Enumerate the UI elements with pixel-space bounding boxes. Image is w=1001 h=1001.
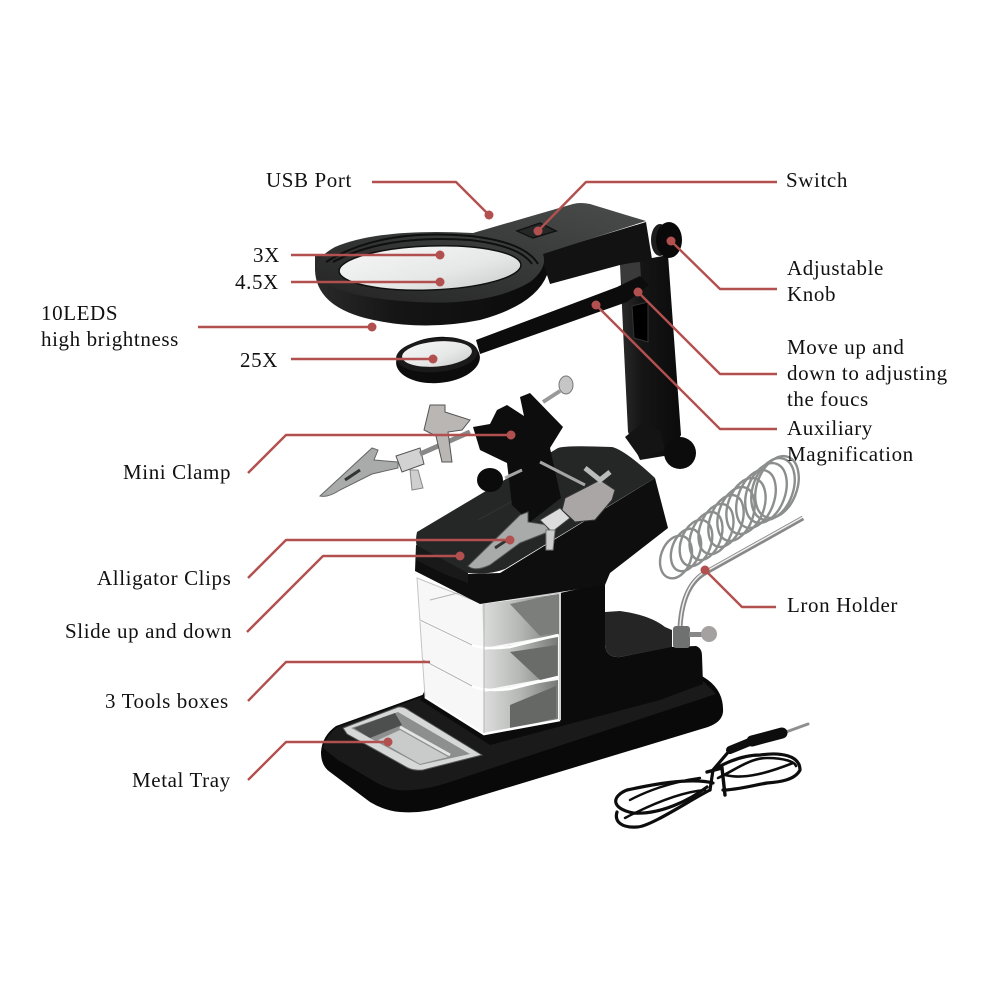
callout: Move up and down: Move up and bbox=[787, 335, 904, 359]
25X auxiliary magnifier bbox=[394, 333, 482, 387]
callout: 4.5X: 4.5X bbox=[235, 270, 279, 294]
callout: 25X bbox=[240, 348, 438, 372]
callout: Auxiliary Magnification: Magnification bbox=[787, 442, 914, 466]
callout: 25X: 25X bbox=[240, 348, 278, 372]
tool boxes bbox=[417, 578, 560, 734]
callout: Switch bbox=[534, 168, 848, 236]
callout: USB Port bbox=[266, 168, 494, 220]
magnifier head, lower wall bbox=[315, 222, 652, 326]
alligator clip, right bbox=[468, 468, 615, 569]
callout: Alligator Clips: Alligator Clips bbox=[97, 566, 231, 590]
adjustable knob top bbox=[651, 222, 682, 258]
callout: Adjustable Knob: Adjustable bbox=[787, 256, 884, 280]
callout: Metal Tray: Metal Tray bbox=[132, 768, 231, 792]
iron holder spring bbox=[654, 450, 807, 583]
callout: 4.5X bbox=[235, 270, 444, 294]
callout: 3X bbox=[253, 243, 444, 267]
callout: Mini Clamp bbox=[123, 430, 516, 484]
auxiliary arm bbox=[476, 276, 649, 354]
callout: Auxiliary Magnification bbox=[592, 300, 914, 466]
lower block and column bbox=[420, 583, 703, 745]
callout: Adjustable Knob: Knob bbox=[787, 282, 836, 306]
callout: 10LEDS high brightness: 10LEDS bbox=[41, 301, 118, 325]
callout: Move up and down: the foucs bbox=[787, 387, 869, 411]
callout: 10LEDS high brightness: high brightness bbox=[41, 327, 179, 351]
iron holder rod bbox=[673, 517, 803, 648]
callout: Switch: Switch bbox=[786, 168, 848, 192]
power cable bbox=[616, 724, 808, 827]
callout: USB Port: USB Port bbox=[266, 168, 352, 192]
lower arm knob and hinge bbox=[625, 425, 696, 469]
base plate bbox=[321, 668, 723, 812]
callout: Metal Tray bbox=[132, 738, 392, 792]
callout: 10LEDS high brightness bbox=[41, 301, 376, 351]
vertical arm bbox=[620, 255, 681, 460]
mini clamp bbox=[473, 376, 585, 522]
magnifier head, top surface bbox=[316, 203, 646, 303]
callout: Lron Holder: Lron Holder bbox=[787, 593, 898, 617]
callout: Alligator Clips bbox=[97, 536, 514, 590]
metal tray bbox=[343, 707, 482, 770]
callout: 3X: 3X bbox=[253, 243, 280, 267]
callout: Slide up and down bbox=[65, 552, 464, 643]
callout: Lron Holder bbox=[700, 566, 898, 617]
callout: 3 Tools boxes: 3 Tools boxes bbox=[105, 689, 229, 713]
callout: Slide up and down: Slide up and down bbox=[65, 619, 232, 643]
rear platform bbox=[605, 611, 672, 657]
product: magnifier stand with helping hands bbox=[315, 203, 808, 827]
callout: 3 Tools boxes bbox=[105, 662, 430, 713]
alligator clip, left bbox=[320, 405, 470, 496]
callout: Move up and down bbox=[634, 288, 948, 411]
callout: Adjustable Knob bbox=[666, 236, 884, 306]
callout: Mini Clamp: Mini Clamp bbox=[123, 460, 231, 484]
upper housing bbox=[415, 446, 668, 604]
callout: Move up and down: down to adjusting bbox=[787, 361, 948, 385]
3X and 4.5X main lens bbox=[338, 243, 522, 293]
callout: Auxiliary Magnification: Auxiliary bbox=[787, 416, 873, 440]
